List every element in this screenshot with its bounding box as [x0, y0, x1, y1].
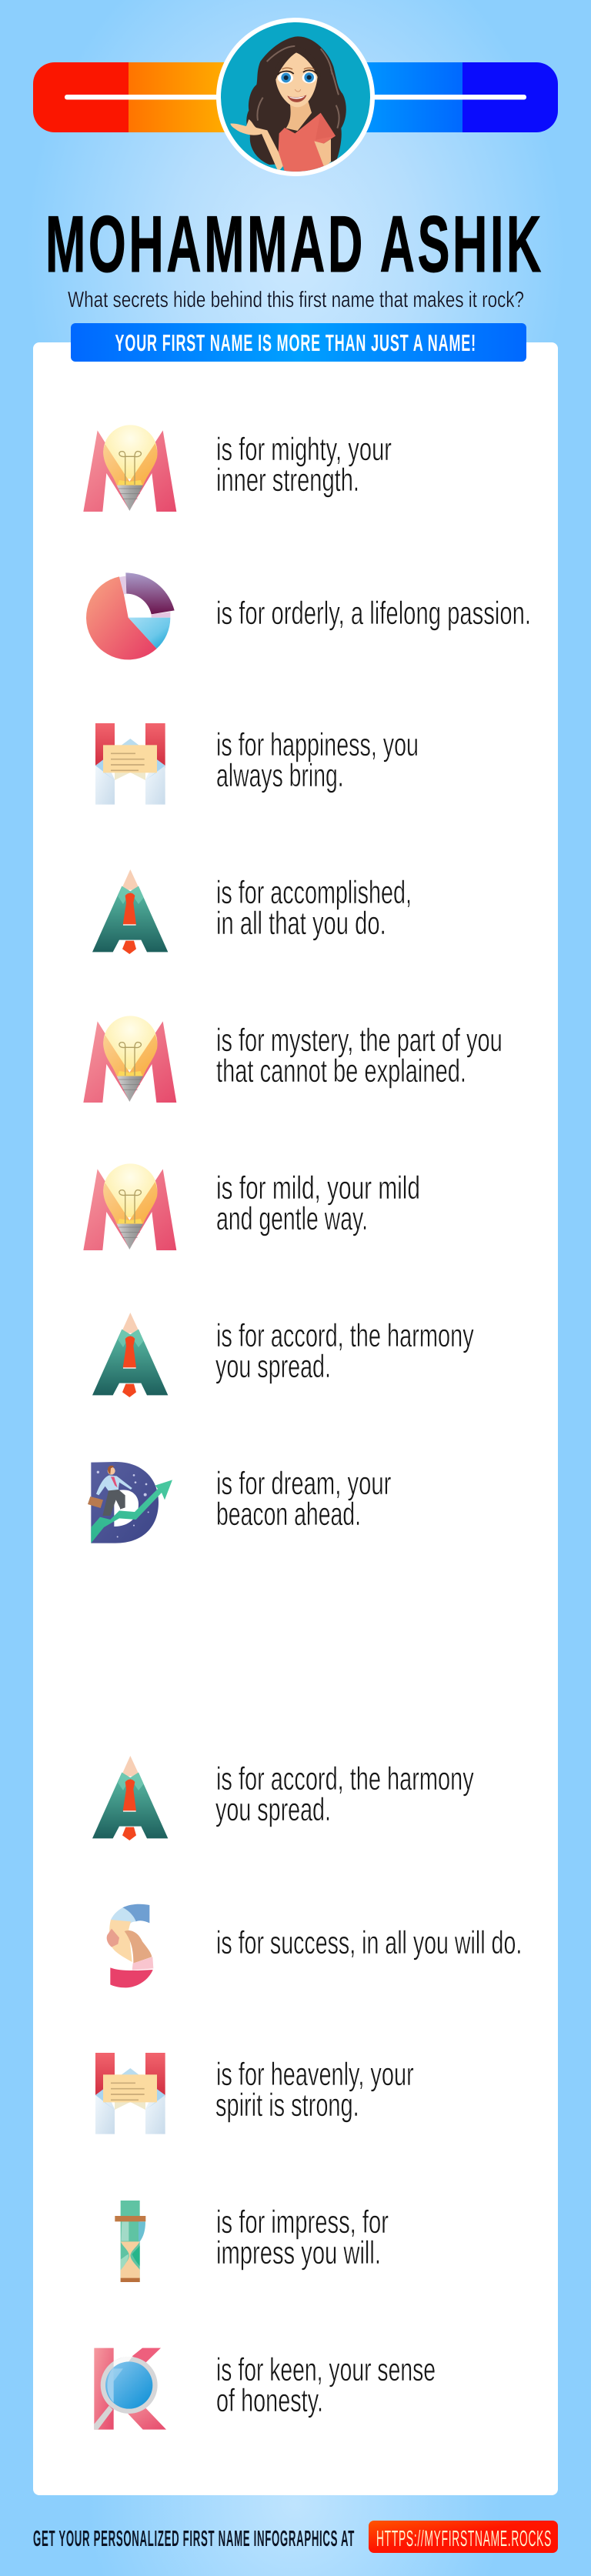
text: heavenly: spirit is strong.: [215, 2087, 359, 2123]
text: keen: [216, 2351, 436, 2418]
text: heavenly: [215, 2056, 414, 2123]
text: impress: impress you will.: [216, 2234, 381, 2271]
text: mild: is for mild, your mild: [216, 1170, 420, 1206]
text: accord: is for accord, the harmony: [216, 1317, 474, 1353]
text: accord: [215, 1760, 474, 1827]
white content panel: [33, 342, 558, 2495]
icon: I hourglass: [115, 2201, 145, 2282]
icon: K magnifier: [94, 2348, 166, 2430]
icon: A necktie: [92, 1313, 168, 1397]
text: happiness: is for happiness, you: [216, 726, 419, 762]
row: M mild: [83, 1163, 420, 1250]
row: H heavenly: [95, 2053, 414, 2134]
text: happiness: [216, 726, 419, 793]
row: D dream: [88, 1462, 391, 1543]
row: O orderly: [86, 572, 531, 659]
row: A accord: [92, 1313, 474, 1397]
text: impress: [216, 2204, 389, 2271]
text: mighty: [216, 431, 392, 498]
text: mystery: that cannot be explained.: [216, 1053, 466, 1089]
text: dream: is for dream, your: [216, 1465, 391, 1501]
row: A accomplished: [92, 869, 412, 954]
text: impress: is for impress, for: [216, 2204, 389, 2240]
icon: O pie chart: [86, 572, 175, 659]
icon: A necktie: [92, 869, 168, 954]
text: accomplished: [216, 874, 412, 941]
row: M mystery: [83, 1016, 503, 1103]
text: accord: you spread.: [215, 1348, 331, 1384]
icon: S handshake: [107, 1904, 153, 1987]
icon: M lightbulb: [83, 1016, 176, 1103]
icon: M lightbulb: [83, 425, 176, 512]
text: keen: of honesty.: [216, 2382, 323, 2418]
row: A accord second: [92, 1756, 474, 1840]
text: accomplished: in all that you do.: [216, 905, 386, 941]
row: K keen: [94, 2348, 436, 2430]
text: dream: beacon ahead.: [216, 1496, 361, 1532]
text: mild: [216, 1170, 420, 1236]
icon: H envelope: [95, 723, 165, 805]
text: dream: [216, 1465, 391, 1532]
row: S success: [107, 1904, 522, 1987]
text: accord: is for accord, the harmony: [216, 1760, 474, 1797]
text: keen: is for keen, your sense: [216, 2351, 436, 2387]
text: heavenly: is for heavenly, your: [216, 2056, 414, 2092]
text: happiness: always bring.: [216, 757, 344, 793]
icon: H envelope: [95, 2053, 165, 2134]
icon: A necktie: [92, 1756, 168, 1840]
header ribbon bar: [33, 62, 558, 132]
text: accord: you spread.: [215, 1791, 331, 1827]
portrait badge: [216, 18, 375, 176]
row: M mighty: [83, 425, 392, 512]
icon: D climbing arrow: [88, 1462, 172, 1543]
footer link button: [369, 2521, 558, 2553]
banner: [71, 323, 526, 362]
text: accord: [215, 1317, 474, 1384]
text: mild: and gentle way.: [216, 1200, 368, 1236]
row: H happiness: [95, 723, 419, 805]
text: mystery: [216, 1022, 503, 1089]
icon: M lightbulb: [83, 1163, 176, 1250]
text: mighty: is for mighty, your: [216, 431, 392, 467]
text: accomplished: is for accomplished,: [216, 874, 412, 910]
text: mighty: inner strength.: [216, 462, 359, 498]
row: I impress: [115, 2201, 389, 2282]
